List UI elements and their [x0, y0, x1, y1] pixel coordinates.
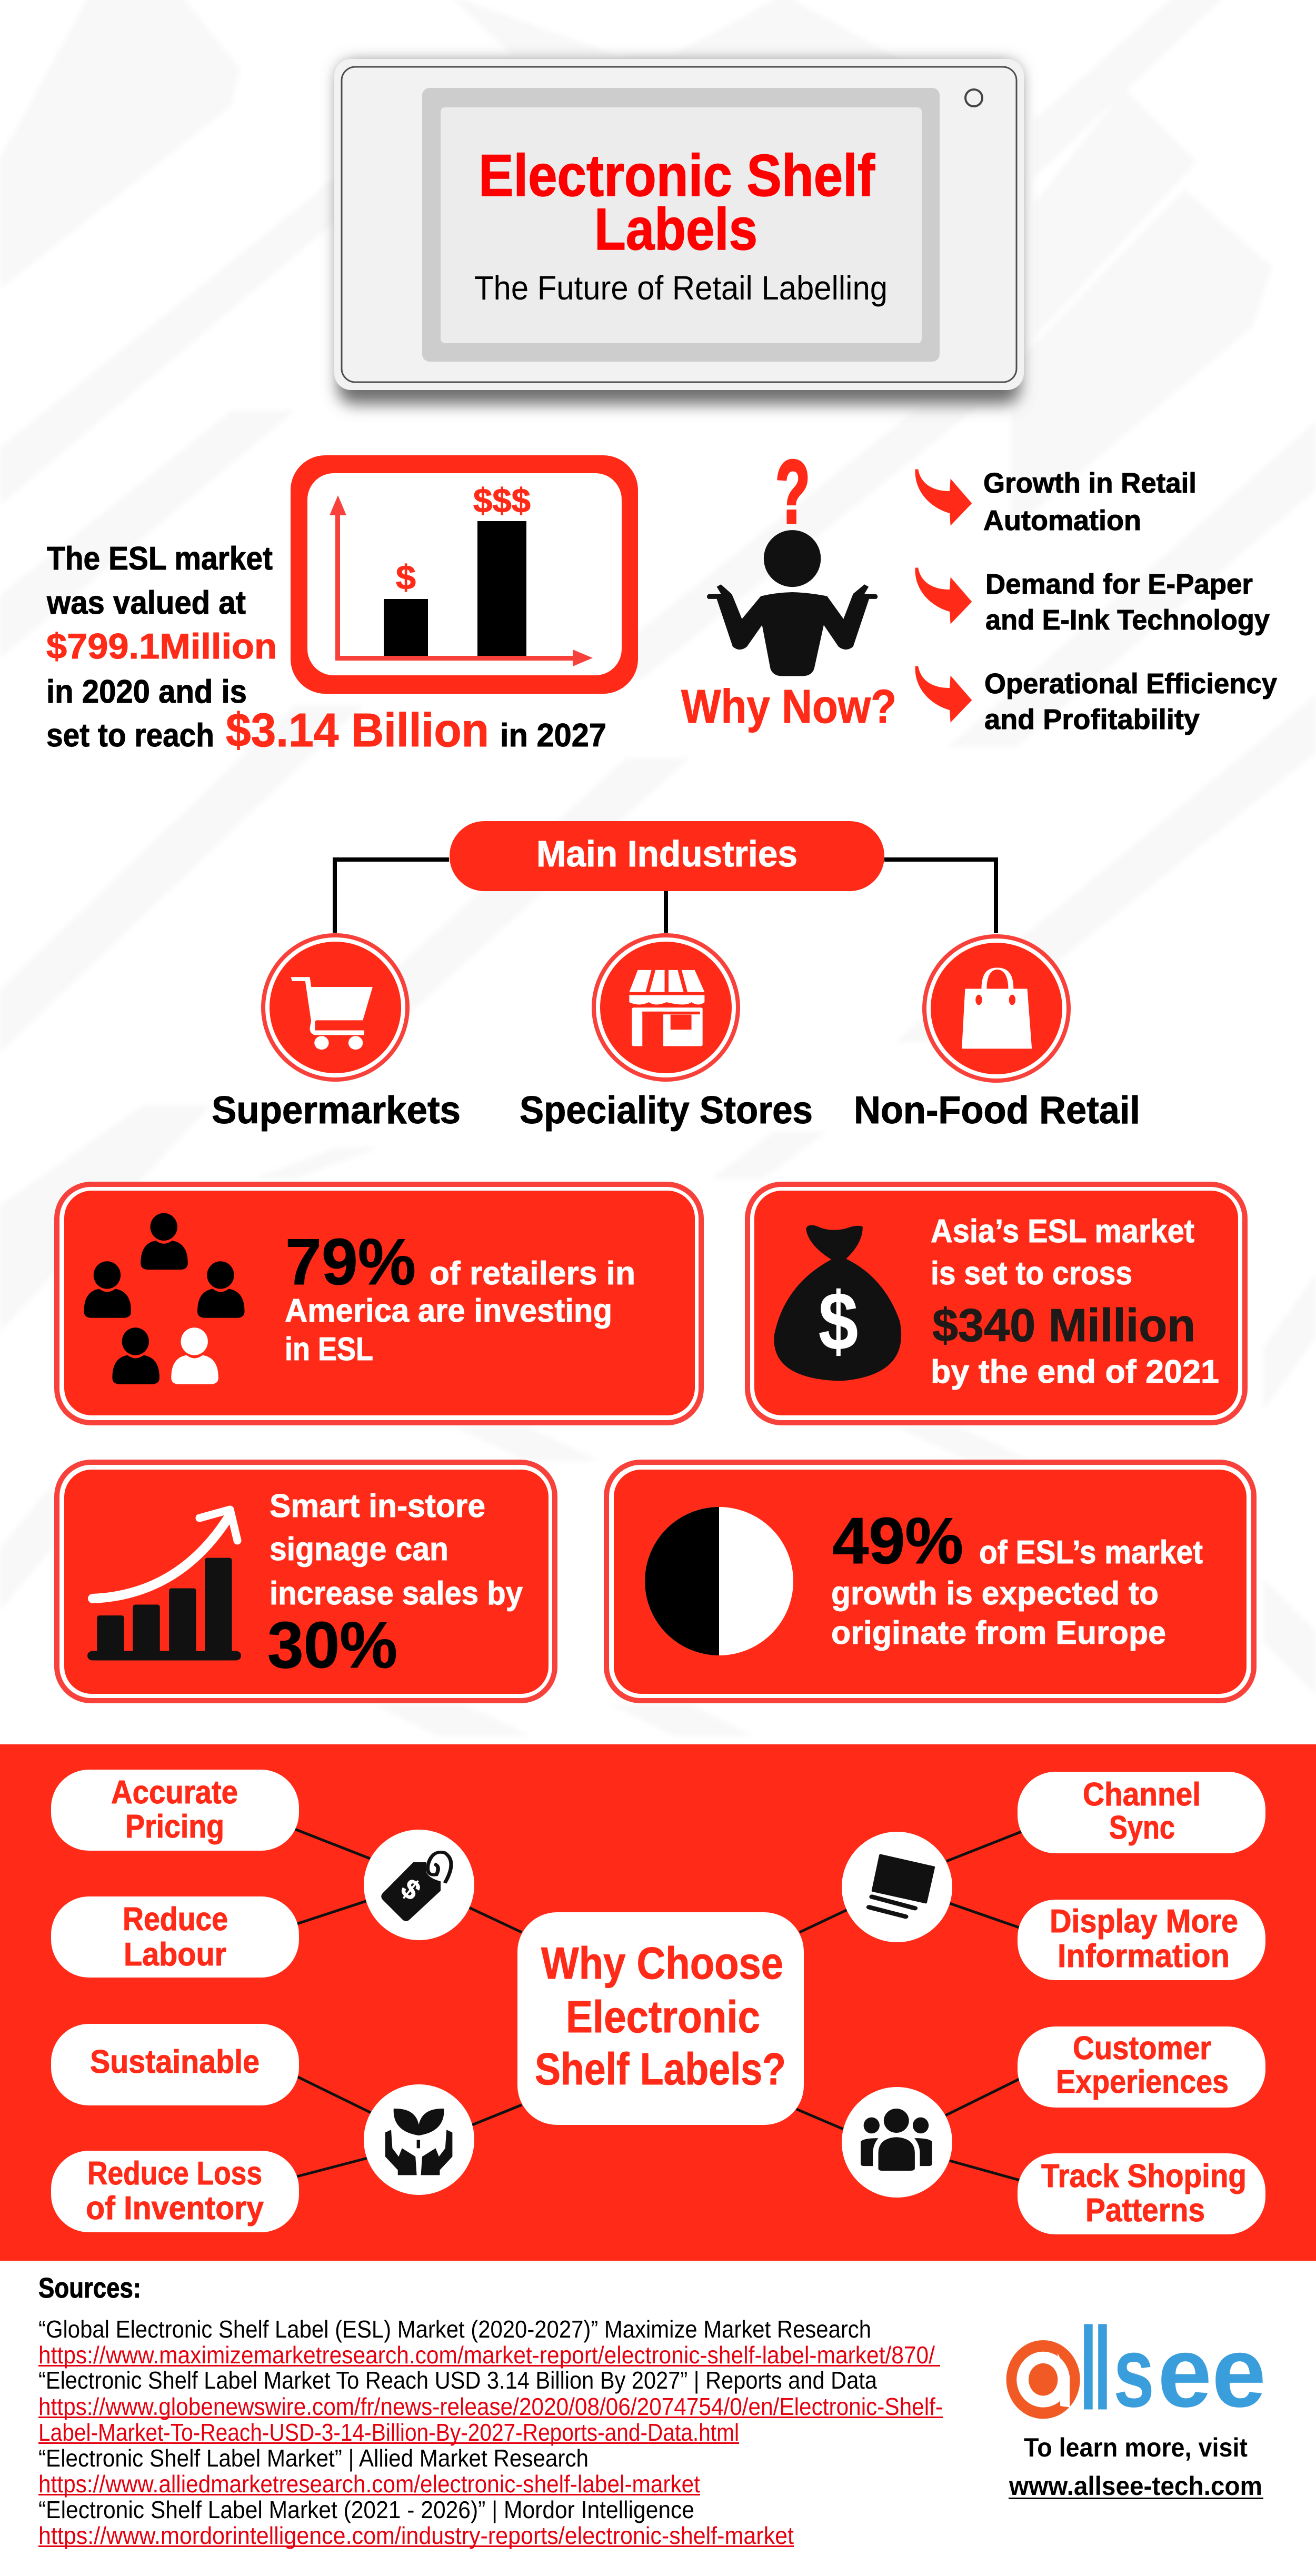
stat text — [831, 1505, 1203, 1651]
logo wordmark: ee — [1158, 2317, 1266, 2428]
stat text: 79% — [285, 1226, 416, 1299]
reason: operational efficiency — [984, 668, 1277, 735]
icon: shrugging person — [707, 530, 878, 676]
icon: money bag: $ — [819, 1276, 858, 1367]
pill: reduce loss of inventory: of Inventory — [86, 2190, 264, 2226]
connector lines — [295, 1829, 1021, 2180]
center box: Shelf Labels? — [535, 2044, 786, 2094]
stat text: increase sales by — [270, 1575, 523, 1612]
market value text — [46, 541, 606, 757]
stat text: 49% — [832, 1505, 963, 1577]
pill: customer experiences: Customer — [1073, 2030, 1211, 2066]
stat text: by the end of 2021 — [931, 1354, 1219, 1390]
title: Labels — [594, 196, 757, 262]
reason: growth in retail automation: Automation — [983, 505, 1141, 536]
pill: accurate pricing: Accurate — [111, 1774, 238, 1811]
bar: 2027 — [477, 521, 526, 656]
industry labels: Non-Food Retail — [854, 1089, 1140, 1132]
market value text: The ESL market — [47, 541, 273, 577]
stat text: Smart in-store — [270, 1488, 485, 1524]
center box: Why Choose — [541, 1939, 783, 1989]
stat text — [931, 1213, 1219, 1390]
source list — [38, 2315, 943, 2549]
pill: track shopping patterns: Track Shoping — [1041, 2158, 1247, 2194]
pill: display more information — [1018, 1900, 1265, 1980]
stat text: Asia’s ESL market — [931, 1213, 1194, 1250]
market value text: in 2027 — [500, 717, 606, 754]
source list: https://www.alliedmarketresearch.com/electronic-shelf-label-market — [38, 2470, 700, 2498]
icon: five people — [84, 1213, 245, 1384]
pill: channel sync — [1018, 1772, 1265, 1853]
source list: Label-Market-To-Reach-USD-3-14-Billion-By-2027-Reports-and-Data.html — [38, 2419, 739, 2446]
pill: reduce loss of inventory: Reduce Loss — [87, 2155, 262, 2192]
pill: customer experiences: Experiences — [1056, 2064, 1229, 2100]
stat text — [267, 1488, 523, 1682]
pill: display more information: Display More — [1050, 1903, 1238, 1940]
panel: smart in-store signage — [54, 1460, 557, 1703]
bar: 2020 — [384, 599, 428, 656]
stat text: of retailers in — [430, 1255, 635, 1292]
center box: Electronic — [566, 1992, 760, 2042]
icon: storefront — [592, 933, 740, 1082]
why now reasons — [915, 467, 1277, 735]
dollar labels — [396, 481, 531, 596]
icon: shopping bag — [922, 934, 1071, 1083]
reason: demand for e-paper: and E-Ink Technology — [985, 604, 1270, 636]
icon: growth chart — [87, 1510, 241, 1661]
pill: sustainable — [51, 2024, 299, 2105]
stat text: originate from Europe — [831, 1615, 1166, 1651]
source list: https://www.mordorintelligence.com/industry-reports/electronic-shelf-market — [38, 2522, 794, 2549]
market value text: was valued at — [46, 585, 246, 621]
panel: 49% from Europe — [604, 1460, 1257, 1703]
market value text: set to reach — [46, 717, 214, 754]
title: Electronic Shelf — [478, 143, 875, 208]
industry labels — [212, 1089, 1140, 1132]
source list: “Electronic Shelf Label Market” | Allied Market Research — [38, 2444, 589, 2472]
question mark: ? — [775, 442, 810, 542]
stat text — [285, 1226, 635, 1367]
reason: demand for e-paper — [985, 568, 1270, 636]
icon: money bag — [774, 1225, 901, 1381]
panel: 79% of retailers — [54, 1182, 704, 1425]
connector lines — [335, 860, 996, 933]
pie chart: 49 percent — [645, 1507, 793, 1655]
stat text: signage can — [270, 1531, 448, 1567]
logo wordmark: ll — [1081, 2306, 1110, 2432]
logo mark — [1006, 2340, 1080, 2419]
reason: growth in retail automation: Growth in Retail — [983, 467, 1197, 499]
chart axes arrows — [330, 495, 593, 666]
icon: hands and plant — [364, 2084, 474, 2195]
icon: display screen — [842, 1832, 952, 1942]
icon: shopping cart — [261, 933, 410, 1082]
reason: operational efficiency: Operational Efficiency — [984, 668, 1277, 700]
market value text: $799.1Million — [46, 626, 277, 666]
market value text: in 2020 and is — [46, 674, 247, 710]
pill: accurate pricing: Pricing — [125, 1809, 224, 1845]
icon: customers group — [842, 2087, 952, 2198]
industry labels: Supermarkets — [212, 1089, 461, 1132]
stat text: America are investing — [285, 1293, 612, 1329]
source list: https://www.globenewswire.com/fr/news-release/2020/08/06/2074754/0/en/Electronic-Shelf- — [38, 2393, 943, 2420]
arrow 2 — [915, 568, 972, 624]
center box — [517, 1912, 804, 2125]
heading pill: Main Industries — [536, 833, 797, 874]
website link: www.allsee-tech.com — [1009, 2471, 1262, 2501]
reason: growth in retail automation — [983, 467, 1197, 536]
title — [478, 143, 875, 262]
stat text: $340 Million — [932, 1299, 1195, 1351]
heading pill — [450, 821, 884, 891]
pill: customer experiences — [1018, 2026, 1265, 2108]
reason: operational efficiency: and Profitability — [984, 704, 1200, 735]
industry labels: Speciality Stores — [520, 1089, 813, 1132]
pill: reduce labour: Reduce — [123, 1901, 228, 1938]
pill: accurate pricing — [51, 1770, 299, 1851]
header device: electronic shelf label — [334, 59, 1024, 404]
dollar labels: $ — [396, 558, 416, 596]
logo wordmark: s — [1113, 2317, 1154, 2428]
source list: “Electronic Shelf Label Market (2021 - 2026)” | Mordor Intelligence — [38, 2496, 694, 2523]
stat text: growth is expected to — [831, 1575, 1159, 1612]
stat text: 30% — [267, 1609, 397, 1682]
learn more text: To learn more, visit — [1024, 2433, 1248, 2462]
allsee logo and call to action — [1006, 2306, 1266, 2501]
pill: reduce loss of inventory — [51, 2151, 299, 2232]
source list: “Electronic Shelf Label Market To Reach USD 3.14 Billion By 2027” | Reports and Data — [38, 2367, 877, 2394]
pill: track shopping patterns — [1018, 2153, 1265, 2234]
sources heading: Sources: — [38, 2272, 141, 2304]
arrow 3 — [915, 666, 972, 723]
panel: why choose electronic shelf labels — [0, 1744, 1316, 2261]
panel: Asia's ESL market — [745, 1182, 1248, 1425]
bar chart panel — [291, 455, 638, 694]
main industries section — [212, 821, 1140, 1132]
pill: sustainable: Sustainable — [90, 2044, 260, 2080]
pill: track shopping patterns: Patterns — [1085, 2192, 1205, 2229]
sources — [38, 2272, 943, 2549]
stat text: is set to cross — [931, 1255, 1132, 1292]
stat text: in ESL — [285, 1331, 373, 1367]
subtitle: The Future of Retail Labelling — [474, 269, 888, 307]
pill: reduce labour: Labour — [124, 1936, 226, 1973]
source list: https://www.maximizemarketresearch.com/market-report/electronic-shelf-label-market/870/ — [38, 2341, 935, 2369]
pill: reduce labour — [51, 1896, 299, 1978]
reason: demand for e-paper: Demand for E-Paper — [985, 568, 1253, 600]
pill: channel sync: Sync — [1109, 1810, 1175, 1846]
logo wordmark — [1081, 2306, 1266, 2432]
stat text: of ESL’s market — [979, 1534, 1203, 1571]
pill: channel sync: Channel — [1083, 1776, 1201, 1813]
heading: why now: Why Now? — [681, 681, 896, 733]
icon: price tag: $ — [395, 1873, 426, 1906]
market value text: $3.14 Billion — [226, 704, 489, 757]
dollar labels: $$$ — [473, 481, 531, 520]
icon: price tag — [364, 1830, 474, 1940]
pill: display more information: Information — [1058, 1938, 1230, 1974]
why now figure — [681, 442, 896, 733]
arrow 1 — [915, 470, 972, 526]
source list: “Global Electronic Shelf Label (ESL) Market (2020-2027)” Maximize Market Research — [38, 2315, 871, 2343]
